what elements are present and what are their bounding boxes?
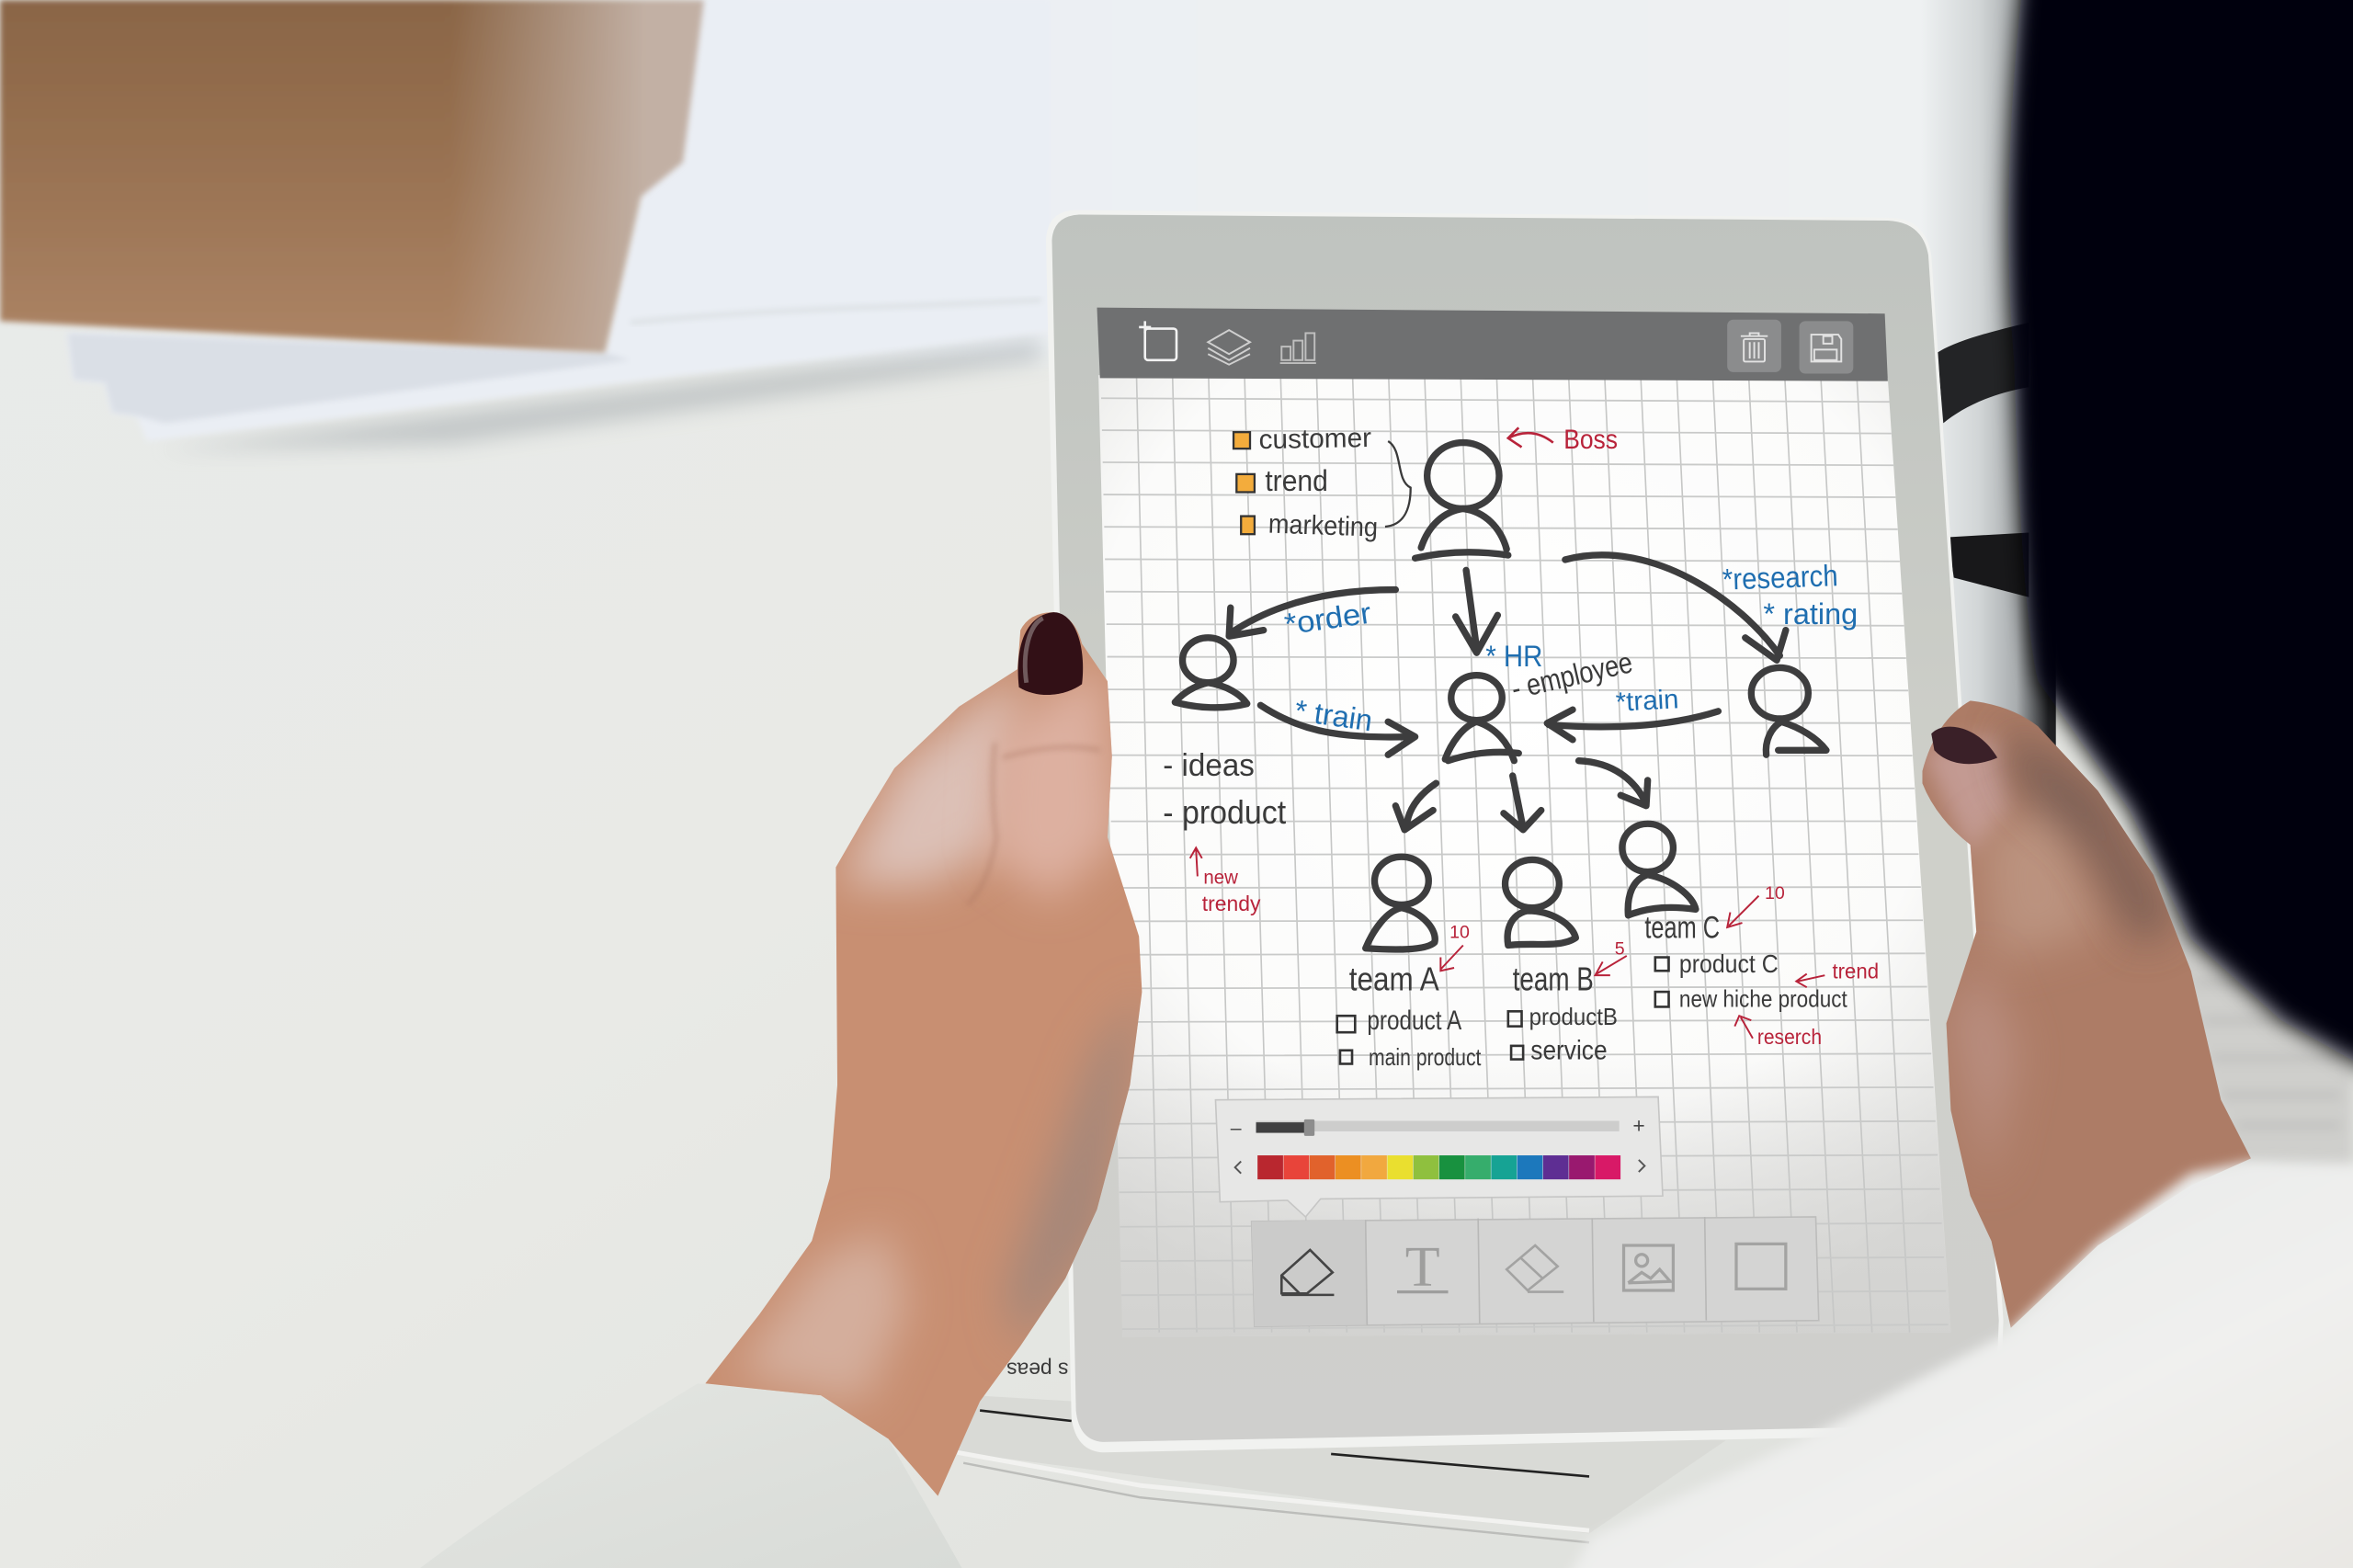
black notes: - ideas <box>1163 748 1255 783</box>
arrow: boss to left manager <box>1229 590 1395 636</box>
red note: boss: Boss <box>1563 425 1618 455</box>
bottom tool tray <box>1252 1217 1819 1326</box>
right sleeve <box>1561 1162 2353 1568</box>
icon: rectangle <box>1736 1244 1786 1289</box>
red notes: 10 <box>1765 883 1785 903</box>
thumb crease <box>982 743 1099 883</box>
figure: left manager <box>1175 638 1247 708</box>
boss checklist: marketing <box>1267 509 1379 543</box>
figure: team C <box>1622 824 1696 915</box>
black notes <box>1163 644 1720 997</box>
thumb skin <box>991 660 1118 901</box>
blue annotations <box>1282 558 1858 737</box>
arrow: HR to team B <box>1504 776 1541 830</box>
fingernail <box>1931 727 1997 764</box>
left hand holding tablet <box>690 600 1155 1516</box>
icon: image <box>1624 1245 1673 1290</box>
red notes <box>1190 847 1879 1049</box>
team product lists: product C <box>1679 949 1779 978</box>
team product lists <box>1337 949 1847 1071</box>
papers under tablet <box>958 1358 1726 1542</box>
icon: text tool <box>1397 1236 1449 1299</box>
shadow on heel of thumb <box>1006 990 1143 1350</box>
red notes: reserch <box>1757 1025 1822 1049</box>
brown folder <box>0 0 704 353</box>
black notes: team C <box>1644 910 1720 945</box>
team product lists: new hiche product <box>1679 984 1847 1012</box>
button: delete <box>1727 320 1781 372</box>
brush settings popup <box>1215 1096 1663 1217</box>
blue annotations: *research <box>1722 558 1838 597</box>
stroke size slider: – <box>1231 1118 1242 1139</box>
team product lists: product A <box>1367 1006 1462 1036</box>
fingertip skin <box>1921 735 2011 856</box>
tablet screen with grid <box>1098 375 1950 1337</box>
printed text on paper: s peas <box>1006 1358 1068 1381</box>
red notes: 10 <box>1449 922 1470 942</box>
icon: text tool: T <box>1405 1236 1440 1299</box>
icon: eraser <box>1506 1245 1563 1292</box>
team product lists: productB <box>1529 1003 1618 1030</box>
shadow at top of hand <box>2004 721 2176 945</box>
boss checklist: customer <box>1258 423 1372 455</box>
red notes: trendy <box>1202 892 1261 915</box>
blue annotations: *train <box>1615 684 1679 718</box>
arrow: boss to right manager <box>1565 555 1786 660</box>
black notes: team B <box>1513 960 1594 997</box>
red note: boss <box>1508 425 1618 455</box>
team product lists: service <box>1530 1036 1608 1066</box>
person's dark hair <box>2008 0 2353 1088</box>
right hand holding tablet <box>1923 700 2251 1327</box>
dark mug handle behind tablet <box>1938 323 2029 597</box>
blue annotations: * train <box>1292 693 1375 737</box>
arrow: boss to HR <box>1456 570 1497 653</box>
boss checklist <box>1233 423 1411 543</box>
figure: right manager <box>1751 667 1826 755</box>
icon: new page <box>1139 321 1176 360</box>
thumbnail <box>1018 612 1083 695</box>
figure: boss <box>1415 443 1508 558</box>
black notes: - product <box>1163 793 1286 831</box>
red notes: new <box>1203 868 1239 889</box>
figure: team A <box>1366 857 1435 949</box>
grey wall behind tablet <box>1921 0 2056 750</box>
colour palette <box>1235 1155 1644 1179</box>
boss checklist: trend <box>1265 463 1328 497</box>
icon: pen <box>1281 1250 1334 1295</box>
stroke size slider <box>1231 1114 1645 1139</box>
figure: team B <box>1506 859 1575 945</box>
button: save <box>1800 321 1853 374</box>
stroke size slider: + <box>1632 1114 1645 1138</box>
figure: HR employee <box>1445 676 1518 761</box>
blue annotations: * HR <box>1485 639 1542 673</box>
tablet body <box>1046 210 2004 1452</box>
arrow: HR to team A <box>1395 783 1436 830</box>
wrist highlight <box>735 1231 908 1403</box>
red notes: trend <box>1832 959 1879 983</box>
top toolbar <box>1097 308 1888 381</box>
red notes: 5 <box>1615 938 1625 959</box>
left sleeve <box>420 1383 962 1568</box>
team product lists: main product <box>1369 1043 1482 1071</box>
blue annotations: *order <box>1282 596 1373 641</box>
back of hand highlight <box>840 676 1020 885</box>
lit knuckle <box>1981 795 2101 960</box>
blue annotations: * rating <box>1763 597 1858 631</box>
icon: bar chart <box>1280 333 1316 363</box>
icon: layers <box>1208 330 1250 365</box>
paper stack on desk <box>67 0 1051 450</box>
pale hand edge <box>1947 979 2024 1147</box>
black notes: team A <box>1349 960 1439 997</box>
arrow: right manager to HR <box>1547 710 1718 740</box>
arrow: left manager to HR <box>1260 705 1415 755</box>
book pages at right <box>2146 885 2353 1186</box>
arrow: HR to team C <box>1579 761 1648 806</box>
black notes: - employee <box>1508 644 1635 706</box>
org chart sketch <box>1175 443 1826 949</box>
